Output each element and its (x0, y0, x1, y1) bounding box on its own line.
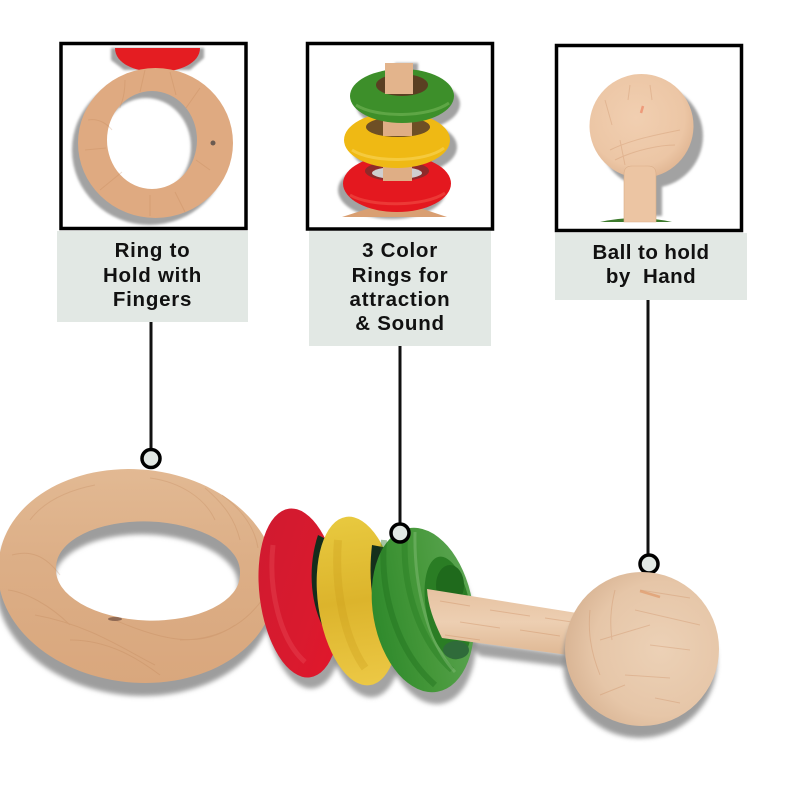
label: color rings: & Sound (355, 312, 445, 335)
inset: ball detail (556, 46, 742, 230)
connector lines (142, 300, 658, 573)
label: ball to hold (555, 233, 747, 300)
yellow ring (344, 112, 450, 168)
green ring (350, 63, 454, 123)
inset frame (308, 44, 492, 229)
stick top (385, 63, 413, 94)
wooden ring face (78, 68, 233, 218)
label: ball to hold: Ball to hold (592, 241, 710, 264)
main toy: ring and coloured rings (0, 469, 577, 712)
label: ring to hold: Fingers (113, 288, 192, 311)
ball shadow (599, 84, 703, 216)
inset frame (61, 44, 246, 228)
red ring fragment (115, 48, 200, 72)
yellow ring (307, 511, 409, 691)
label: color rings: attraction (350, 288, 450, 311)
label: ring to hold: Ring to (115, 239, 190, 262)
shadows under rings (0, 482, 572, 712)
green ring sliver (600, 218, 672, 222)
wooden ring (0, 469, 276, 683)
inset: ring detail (61, 44, 246, 228)
label: color rings: 3 Color (362, 239, 438, 262)
red ring (343, 161, 451, 212)
label: color rings: Rings for (352, 264, 448, 287)
label: color rings (309, 231, 491, 346)
wooden ball (563, 572, 719, 738)
inset frame (556, 46, 742, 230)
label: ring to hold (57, 231, 248, 322)
green ring (359, 520, 487, 700)
inset: color rings detail (308, 44, 492, 229)
stick (624, 166, 656, 222)
base wood (342, 208, 447, 217)
ring hole (417, 553, 479, 663)
ball (590, 74, 694, 178)
wooden stick (427, 589, 577, 655)
red ring (249, 504, 350, 682)
ring shadows (338, 63, 460, 219)
inset ring shadow (70, 90, 220, 226)
label: ball to hold: by Hand (606, 265, 696, 288)
label: ring to hold: Hold with (103, 264, 202, 287)
